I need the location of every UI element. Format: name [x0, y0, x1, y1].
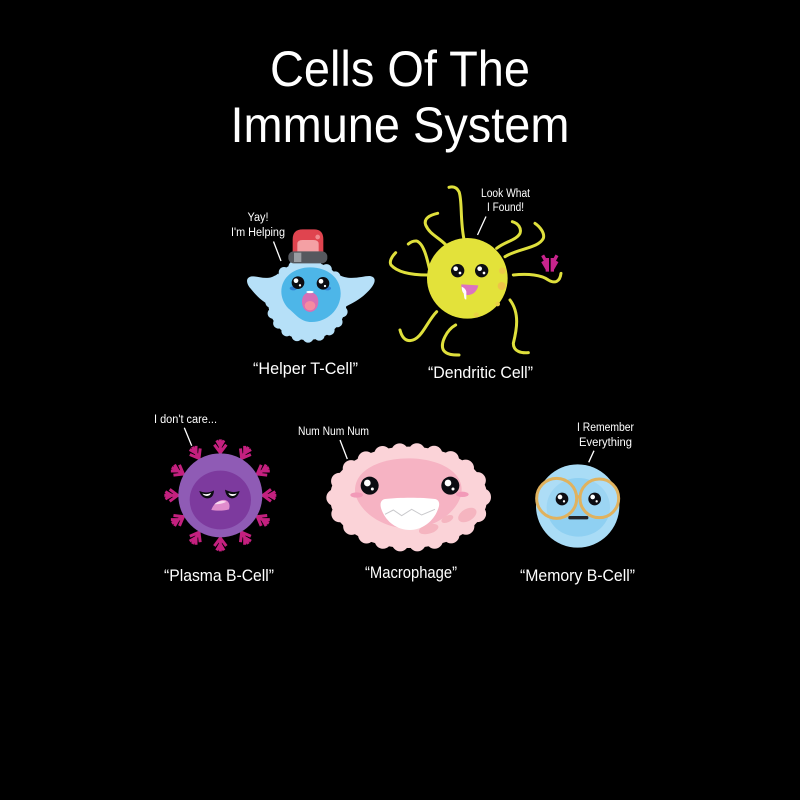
icon: dendritic cell character — [390, 187, 561, 355]
title: Immune System — [230, 97, 570, 153]
speech: look what i found — [478, 188, 531, 235]
icon: memory b-cell character — [536, 464, 619, 548]
speech: i don't care — [154, 414, 217, 446]
icon: magenta antigen — [543, 255, 557, 272]
speech: num num num — [298, 426, 369, 459]
speech: yay: Yay! — [248, 212, 268, 224]
icon: plasma b-cell character — [164, 439, 276, 551]
panel: dendritic cell — [390, 187, 561, 382]
speech: i don't care: I don't care... — [154, 414, 217, 426]
title: Cells Of The — [270, 41, 530, 97]
label: plasma b-cell: “Plasma B-Cell” — [164, 566, 274, 585]
title — [230, 41, 570, 153]
label: dendritic cell: “Dendritic Cell” — [428, 363, 533, 382]
panel: plasma b-cell — [154, 414, 276, 585]
label: helper t-cell: “Helper T-Cell” — [253, 359, 358, 378]
speech: yay: I'm Helping — [231, 227, 285, 239]
icon: macrophage character — [330, 447, 487, 548]
panel: helper t-cell — [231, 212, 375, 378]
label: memory b-cell: “Memory B-Cell” — [520, 566, 635, 585]
speech: i remember everything: I Remember — [577, 422, 634, 434]
icon: helper t-cell character — [247, 229, 375, 340]
speech: yay — [231, 212, 285, 261]
panel: memory b-cell — [520, 422, 635, 585]
speech: i remember everything — [577, 422, 634, 462]
label: macrophage: “Macrophage” — [365, 563, 457, 582]
panel: macrophage — [298, 426, 487, 582]
speech: i remember everything: Everything — [579, 437, 632, 449]
speech: look what i found: Look What — [481, 188, 531, 200]
speech: look what i found: I Found! — [487, 202, 524, 214]
speech: num num num: Num Num Num — [298, 426, 369, 438]
